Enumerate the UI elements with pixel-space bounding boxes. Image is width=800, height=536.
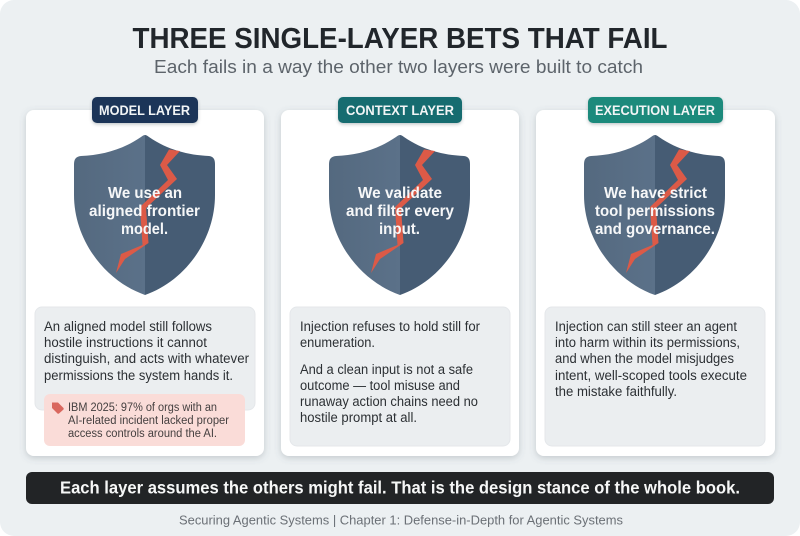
icon: cracked shield: aligned frontier [89,203,200,220]
card background [26,110,264,456]
panel: context layer [281,97,519,456]
text block: context explanation: outcome — tool misuse and [300,378,460,393]
icon: cracked shield: and governance. [595,221,715,238]
text block: model explanation: hostile instructions it cannot [44,335,207,350]
card background [281,110,519,456]
callout: IBM statistic: access controls around the AI. [68,428,217,440]
pill: execution layer [588,97,723,123]
pill: context layer: CONTEXT LAYER [346,103,454,118]
text block: model explanation [35,307,255,410]
text block: execution explanation: and when the model misjudges [555,351,734,366]
title: THREE SINGLE-LAYER BETS THAT FAIL [132,23,668,55]
text block: model explanation: An aligned model still follows [44,319,212,334]
text block: execution explanation: Injection can still steer an agent [555,319,737,334]
text block: execution explanation [545,307,765,446]
panel: model layer [26,97,264,456]
callout: IBM statistic: AI-related incident lacked proper [68,415,229,427]
text block: context explanation: enumeration. [300,335,375,350]
subtitle: Each fails in a way the other two layers were built to catch [154,57,643,77]
icon: cracked shield: tool permissions [595,203,715,220]
text block: context explanation: hostile prompt at all. [300,410,417,425]
text block: context explanation [290,307,510,446]
banner: design stance [26,472,774,504]
panel: execution layer [536,97,775,456]
text block: context explanation: runaway action chains need no [300,394,478,409]
icon: cracked shield [329,135,470,295]
pill: context layer [338,97,462,123]
callout: IBM statistic [44,394,245,446]
text block: context explanation: And a clean input is not a safe [300,362,473,377]
text block: model explanation: permissions the system hands it. [44,368,233,383]
icon: cracked shield: We use an [108,185,182,202]
callout: IBM statistic: IBM 2025: 97% of orgs with an [68,402,217,414]
icon: cracked shield: and filter every [346,203,454,220]
text block: model explanation: distinguish, and acts with whatever [44,351,249,366]
footer: Securing Agentic Systems | Chapter 1: Defense-in-Depth for Agentic Systems [179,514,623,528]
icon: cracked shield: model. [121,221,168,238]
icon: tag [52,402,64,414]
icon: cracked shield: input. [379,221,420,238]
text block: execution explanation: the mistake faithfully. [555,384,677,399]
pill: model layer: MODEL LAYER [99,103,190,118]
icon: cracked shield [584,135,725,295]
icon: cracked shield: We have strict [604,185,707,202]
text block: execution explanation: into harm within its permissions, [555,335,740,350]
pill: execution layer: EXECUTION LAYER [595,103,715,118]
icon: cracked shield: We validate [358,185,442,202]
card background [536,110,775,456]
pill: model layer [92,97,198,123]
icon: cracked shield [74,135,215,295]
text block: execution explanation: intent, well-scoped tools execute [555,368,747,383]
banner: design stance: Each layer assumes the others might fail. That is the design stance of the whole book. [60,478,740,498]
text block: context explanation: Injection refuses to hold still for [300,319,480,334]
